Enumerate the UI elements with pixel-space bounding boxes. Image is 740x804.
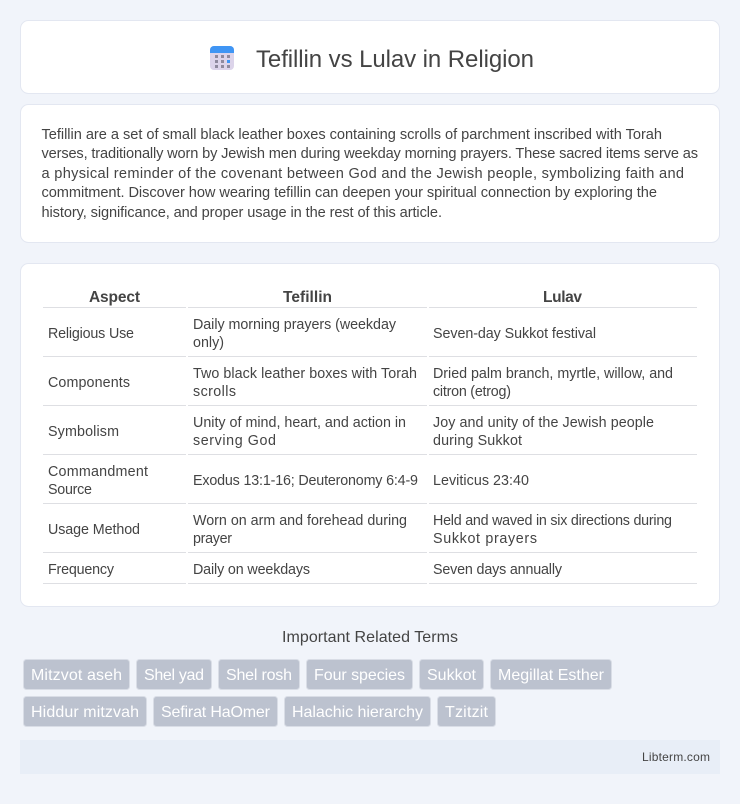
related term tags: Shel rosh <box>226 667 292 684</box>
panel: intro paragraph: history, significance, and proper usage in the rest of this article. <box>42 205 442 221</box>
row: usage method: prayer <box>193 531 232 547</box>
row: frequency <box>48 562 563 578</box>
row: components: Components <box>48 375 130 391</box>
row: religious use: Seven-day Sukkot festival <box>433 326 596 342</box>
row: components <box>48 366 673 400</box>
footer <box>20 740 720 774</box>
title: Tefillin vs Lulav in Religion <box>256 46 534 73</box>
row: symbolism: during Sukkot <box>433 433 522 449</box>
related term tags: Hiddur mitzvah <box>31 704 139 721</box>
related term tags: Megillat Esther <box>498 667 605 684</box>
panel: comparison table <box>20 264 720 606</box>
row: symbolism: serving God <box>193 433 276 449</box>
row: commandment source: Source <box>48 482 92 498</box>
row: symbolism: Symbolism <box>48 424 119 440</box>
panel: intro paragraph <box>20 104 720 242</box>
related term tags: Four species <box>314 667 405 684</box>
row: frequency: Seven days annually <box>433 562 563 578</box>
row: commandment source: Commandment <box>48 464 148 480</box>
row: religious use: only) <box>193 335 224 351</box>
table header: Aspect <box>89 289 140 306</box>
row: usage method: Usage Method <box>48 522 140 538</box>
row: frequency: Frequency <box>48 562 115 578</box>
heading: related terms: Important Related Terms <box>282 629 458 646</box>
row: usage method: Worn on arm and forehead during <box>193 513 407 529</box>
row: commandment source <box>48 464 529 498</box>
panel: intro paragraph: a physical reminder of the covenant between God and the Jewish people, symbolizing faith and <box>42 166 684 182</box>
row: components: scrolls <box>193 384 236 400</box>
row: religious use: Daily morning prayers (weekday <box>193 317 397 333</box>
related term tags: Sefirat HaOmer <box>161 704 271 721</box>
row: usage method: Held and waved in six directions during <box>433 513 672 529</box>
row: symbolism: Unity of mind, heart, and action in <box>193 415 406 431</box>
row: commandment source: Leviticus 23:40 <box>433 473 529 489</box>
panel: intro paragraph: Tefillin are a set of small black leather boxes containing scrolls of parchment inscribed with Torah <box>42 127 662 143</box>
row: frequency: Daily on weekdays <box>193 562 310 578</box>
related term tags: Mitzvot aseh <box>31 667 122 684</box>
row: usage method: Sukkot prayers <box>433 531 537 547</box>
panel: title card <box>20 20 720 94</box>
row: symbolism: Joy and unity of the Jewish people <box>433 415 654 431</box>
related term tags <box>24 660 612 726</box>
related term tags: Tzitzit <box>445 704 489 721</box>
row: usage method <box>48 513 672 547</box>
table header: Tefillin <box>283 289 332 306</box>
icon: calendar <box>210 46 234 70</box>
footer: Libterm.com <box>642 750 710 764</box>
related term tags: Halachic hierarchy <box>292 704 423 721</box>
row: components: Dried palm branch, myrtle, willow, and <box>433 366 673 382</box>
row: commandment source: Exodus 13:1-16; Deuteronomy 6:4-9 <box>193 473 418 489</box>
table header <box>89 289 582 306</box>
panel: intro paragraph: commitment. Discover how wearing tefillin can deepen your spiritual connection by exploring the <box>42 185 657 201</box>
table header: Lulav <box>543 289 582 306</box>
row: religious use: Religious Use <box>48 326 134 342</box>
row: components: Two black leather boxes with Torah <box>193 366 417 382</box>
related term tags: Sukkot <box>427 667 477 684</box>
panel: intro paragraph: verses, traditionally worn by Jewish men during weekday morning prayers. These sacred items serve as <box>42 146 698 162</box>
related term tags: Shel yad <box>144 667 204 684</box>
row: religious use <box>48 317 596 351</box>
row: components: citron (etrog) <box>433 384 511 400</box>
row: symbolism <box>48 415 654 449</box>
